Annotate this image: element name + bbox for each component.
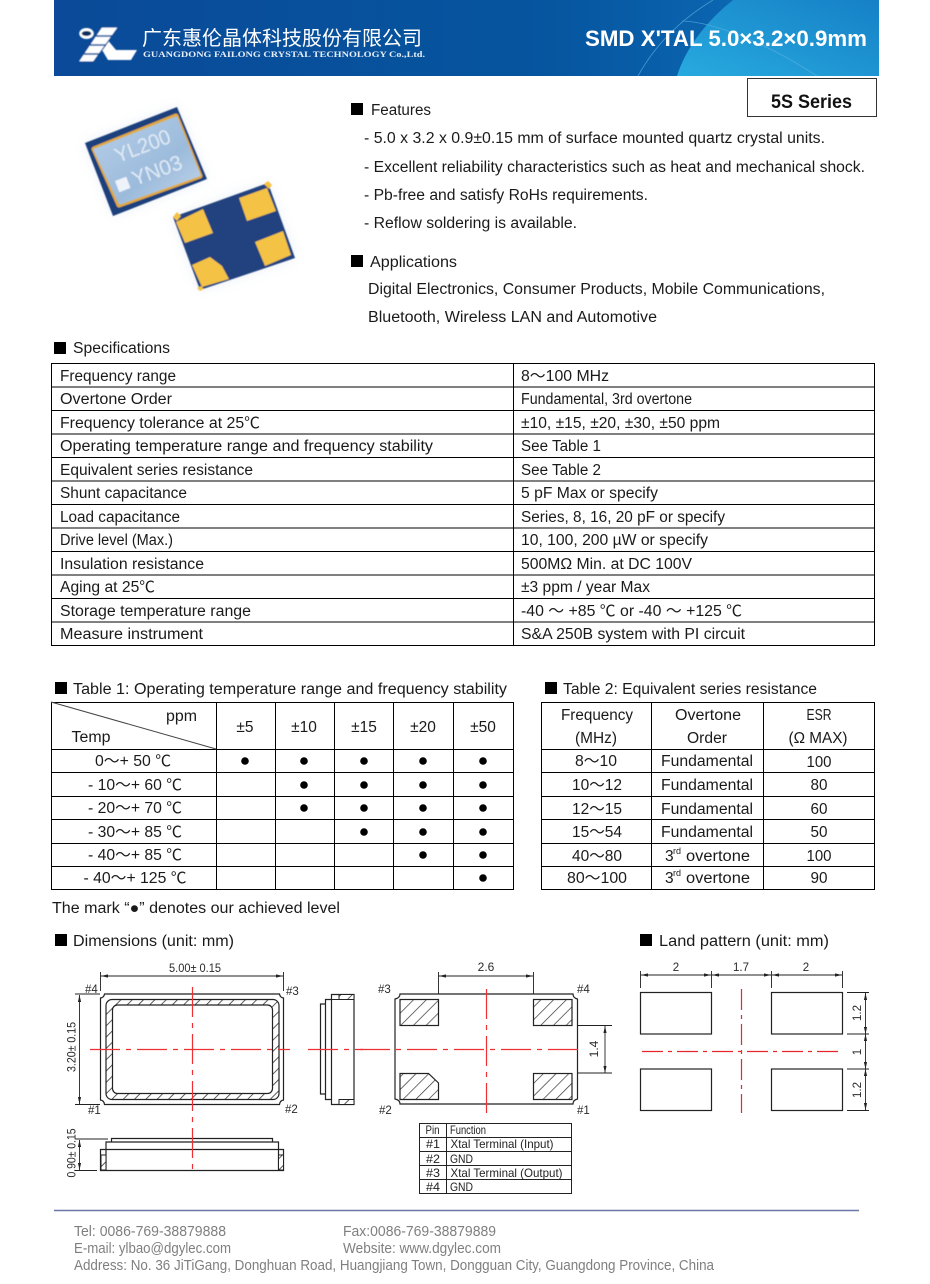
- footer contact block: Website: www.dgylec.com: [343, 1241, 501, 1257]
- table 2: equivalent series resistance: ESR: [806, 707, 832, 724]
- dimension: pad gap 1.4: 1.4: [587, 1040, 601, 1057]
- product title: SMD X'TAL 5.0×3.2×0.9mm: [585, 26, 867, 51]
- specifications table: Storage temperature range: [60, 603, 251, 620]
- specifications table: Overtone Order: [60, 391, 172, 408]
- footer contact block: Address: No. 36 JiTiGang, Donghuan Road, Huangjiang Town, Dongguan City, Guangdong Province, China: [74, 1258, 715, 1274]
- table 1: temperature vs stability: ±10: [291, 719, 317, 736]
- specifications table: 10, 100, 200 µW or specify: [521, 532, 708, 549]
- table 1: temperature vs stability: - 10～+ 60 ℃: [88, 777, 182, 794]
- dimension: height 3.20: 3.20± 0.15: [66, 1022, 78, 1072]
- dimension: thickness 0.90: [66, 1128, 108, 1178]
- right dimensions 1.2, 1, 1.2: 1.2: [852, 1005, 864, 1021]
- pin function table: #2: [426, 1152, 440, 1166]
- applications section: [351, 254, 825, 326]
- table 2: equivalent series resistance: Fundamental: [661, 753, 753, 770]
- specifications table: Load capacitance: [60, 509, 180, 526]
- specifications table: See Table 2: [521, 462, 601, 479]
- applications section: Applications: [370, 254, 457, 271]
- specifications table: See Table 1: [521, 438, 601, 455]
- specifications table: Operating temperature range and frequency stability: [60, 438, 433, 455]
- drawing: side view: [320, 994, 354, 1104]
- table 2: equivalent series resistance: (Ω MAX): [788, 730, 848, 747]
- applications section: Bluetooth, Wireless LAN and Automotive: [368, 309, 657, 326]
- specifications table: Drive level (Max.): [60, 532, 173, 549]
- specifications table: 5 pF Max or specify: [521, 485, 658, 502]
- land pattern heading: Land pattern (unit: mm): [659, 933, 829, 950]
- top side of crystal: YL200: [112, 125, 174, 168]
- pin labels bottom view: #4: [577, 984, 590, 996]
- drawing: bottom view with pads: [360, 960, 612, 1117]
- specifications table: Measure instrument: [60, 626, 204, 643]
- table 2: equivalent series resistance: 40～80: [572, 848, 622, 865]
- specifications table: Fundamental, 3rd overtone: [521, 391, 692, 408]
- top dimensions 2, 1.7, 2: [640, 962, 842, 988]
- specifications table: [52, 364, 874, 646]
- bottom side of crystal with pads: [173, 181, 295, 291]
- specifications table: Equivalent series resistance: [60, 462, 253, 479]
- specifications table: Shunt capacitance: [60, 485, 187, 502]
- table 1: temperature vs stability: - 20～+ 70 ℃: [88, 800, 182, 817]
- table 1: temperature vs stability: 0～+ 50 ℃: [95, 753, 171, 770]
- table 1: temperature vs stability: ±5: [236, 719, 254, 736]
- pin function table: Xtal Terminal (Output): [450, 1166, 562, 1180]
- achievement dots: [241, 757, 487, 882]
- top dimensions 2, 1.7, 2: 1.7: [733, 962, 749, 974]
- table 2: equivalent series resistance: 80～100: [567, 870, 627, 887]
- table 2: equivalent series resistance: 100: [806, 754, 832, 771]
- table 2: equivalent series resistance: Frequency: [561, 707, 633, 724]
- table 1: temperature vs stability: [51, 702, 514, 890]
- right dimensions 1.2, 1, 1.2: 1.2: [852, 1082, 864, 1098]
- table 2: equivalent series resistance: 90: [810, 870, 828, 887]
- specifications table: 8～100 MHz: [521, 368, 609, 385]
- right dimensions 1.2, 1, 1.2: 1: [852, 1049, 864, 1055]
- header banner: [54, 0, 879, 76]
- table 2: equivalent series resistance: Fundamental: [661, 824, 753, 841]
- pin labels bottom view: #3: [378, 984, 391, 996]
- table 1 heading: Table 1: Operating temperature range and frequency stability: [73, 681, 507, 698]
- table 2: equivalent series resistance: (MHz): [575, 730, 617, 747]
- table 2: equivalent series resistance: Fundamental: [661, 801, 753, 818]
- right dimensions 1.2, 1, 1.2: [847, 992, 869, 1110]
- pin labels bottom view: [378, 984, 590, 1117]
- company name English: GUANGDONG FAILONG CRYSTAL TECHNOLOGY Co.,Ltd.: [143, 49, 425, 59]
- pin function table: GND: [450, 1152, 473, 1166]
- features section: - Reflow soldering is available.: [364, 215, 577, 232]
- dimension: width 5.00: [100, 963, 284, 991]
- applications section: Digital Electronics, Consumer Products, Mobile Communications,: [368, 281, 825, 298]
- table 2: equivalent series resistance: 10～12: [572, 777, 622, 794]
- dimension: pad gap 1.4: [577, 1026, 612, 1073]
- pin function table: GND: [450, 1180, 473, 1194]
- table 2: equivalent series resistance: 12～15: [572, 801, 622, 818]
- table 1: temperature vs stability: ppm: [166, 708, 197, 725]
- table 2: equivalent series resistance: 80: [810, 777, 828, 794]
- specifications table: Frequency range: [60, 368, 176, 385]
- top side of crystal: YN03: [129, 151, 186, 191]
- product photo: crystal units: [85, 107, 295, 291]
- table 1: temperature vs stability: Temp: [72, 729, 110, 746]
- features section: - Pb-free and satisfy RoHs requirements.: [364, 187, 648, 204]
- table 2: equivalent series resistance: overtone: [686, 848, 750, 865]
- table 1: temperature vs stability: - 40～+ 125 ℃: [84, 870, 186, 887]
- table 2: equivalent series resistance: rd: [673, 868, 681, 878]
- features section: Features: [371, 102, 431, 119]
- table 2: equivalent series resistance: Overtone: [675, 707, 741, 724]
- drawing: land pattern: [640, 962, 869, 1113]
- pin function table: #1: [426, 1137, 440, 1151]
- specifications table: Insulation resistance: [60, 556, 204, 573]
- top dimensions 2, 1.7, 2: 2: [803, 962, 809, 974]
- table 2: equivalent series resistance: 3: [665, 848, 674, 865]
- table 2: equivalent series resistance: 50: [810, 824, 828, 841]
- specifications table: Aging at 25℃: [60, 579, 155, 596]
- dimension: height 3.20: [66, 994, 100, 1104]
- series label box: 5S Series: [771, 92, 852, 113]
- table 1: temperature vs stability: - 30～+ 85 ℃: [88, 824, 182, 841]
- specifications table: S&A 250B system with PI circuit: [521, 626, 746, 643]
- features section: - Excellent reliability characteristics such as heat and mechanical shock.: [364, 159, 865, 176]
- dimension: pad spacing 2.6: 2.6: [478, 960, 495, 974]
- specifications table: -40 ～ +85 ℃ or -40 ～ +125 ℃: [521, 603, 742, 620]
- pin function table: Function: [450, 1123, 486, 1137]
- pin function table: #3: [426, 1166, 440, 1180]
- table 2 heading: Table 2: Equivalent series resistance: [563, 681, 817, 698]
- specifications table: Series, 8, 16, 20 pF or specify: [521, 509, 725, 526]
- table 2: equivalent series resistance: 15～54: [572, 824, 622, 841]
- table 1: temperature vs stability: - 40～+ 85 ℃: [88, 847, 182, 864]
- features section: - 5.0 x 3.2 x 0.9±0.15 mm of surface mounted quartz crystal units.: [364, 130, 825, 147]
- dimensions heading: Dimensions (unit: mm): [73, 933, 234, 950]
- table 1: temperature vs stability: ±20: [410, 719, 436, 736]
- table 2: equivalent series resistance: 3: [665, 870, 674, 887]
- table 1: temperature vs stability: ±50: [470, 719, 496, 736]
- footer contact block: [54, 1210, 859, 1274]
- table 2: equivalent series resistance: 8～10: [575, 753, 617, 770]
- footer contact block: Tel: 0086-769-38879888: [74, 1224, 226, 1240]
- specifications table: ±3 ppm / year Max: [521, 579, 650, 596]
- dimension: pad spacing 2.6: [438, 960, 534, 994]
- dimension: thickness 0.90: 0.90± 0.15: [66, 1128, 78, 1178]
- table 2: equivalent series resistance: 100: [806, 848, 832, 865]
- table 2: equivalent series resistance: overtone: [686, 870, 750, 887]
- specifications heading: Specifications: [73, 340, 170, 357]
- pin labels top view: #1: [88, 1105, 101, 1117]
- banner light arc shape: [677, 0, 879, 76]
- series label box: [748, 78, 876, 116]
- table note: The mark “●” denotes our achieved level: [52, 900, 340, 917]
- company name Chinese: 广东惠伦晶体科技股份有限公司: [142, 27, 422, 50]
- table 2: equivalent series resistance: 60: [810, 801, 828, 818]
- pin function table: Xtal Terminal (Input): [450, 1137, 554, 1151]
- table 2: equivalent series resistance: [542, 702, 874, 890]
- center lines: top and side views: [90, 987, 363, 1175]
- pin function table: [420, 1123, 572, 1194]
- table 2: equivalent series resistance: rd: [673, 846, 681, 856]
- drawing: front view: [66, 1128, 284, 1178]
- specifications table: Frequency tolerance at 25℃: [60, 415, 260, 432]
- specifications table: ±10, ±15, ±20, ±30, ±50 ppm: [521, 415, 720, 432]
- drawing: top view: [66, 963, 299, 1117]
- pin labels top view: #2: [285, 1104, 298, 1116]
- pin labels top view: #3: [286, 986, 299, 998]
- dimension: width 5.00: 5.00± 0.15: [169, 963, 221, 975]
- pin function table: #4: [426, 1180, 440, 1194]
- table 2: equivalent series resistance: Fundamental: [661, 777, 753, 794]
- table 1: temperature vs stability: ±15: [351, 719, 377, 736]
- footer contact block: Fax:0086-769-38879889: [343, 1224, 496, 1240]
- pin labels bottom view: #1: [577, 1105, 590, 1117]
- top side of crystal: [85, 107, 207, 216]
- features section: [351, 102, 865, 232]
- top dimensions 2, 1.7, 2: 2: [673, 962, 679, 974]
- company logo: [78, 27, 137, 62]
- specifications table: 500MΩ Min. at DC 100V: [521, 556, 693, 573]
- pin labels top view: #4: [85, 984, 98, 996]
- pin labels bottom view: #2: [379, 1105, 392, 1117]
- table 2: equivalent series resistance: Order: [687, 730, 727, 747]
- footer contact block: E-mail: ylbao@dgylec.com: [74, 1241, 231, 1257]
- pin function table: Pin: [426, 1123, 440, 1137]
- pin labels top view: [85, 984, 299, 1117]
